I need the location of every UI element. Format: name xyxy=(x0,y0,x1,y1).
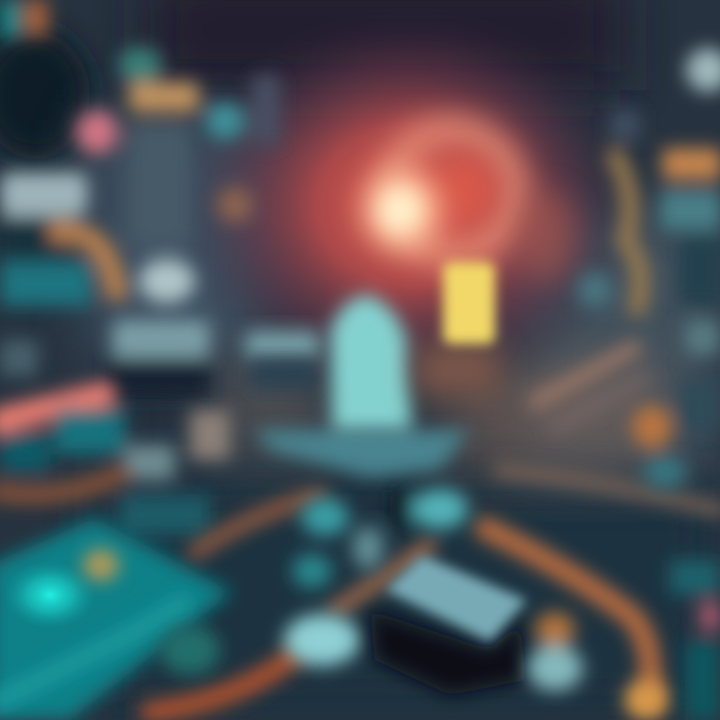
left lower blocks xyxy=(0,380,230,535)
left tower shapes xyxy=(0,0,280,400)
bottom right nodes xyxy=(160,612,668,720)
red glow xyxy=(175,5,645,405)
central tower and platform xyxy=(245,295,500,478)
yellow bulb base xyxy=(443,262,495,344)
right side shapes xyxy=(530,48,720,720)
small teal nodes xyxy=(284,489,468,666)
orange dot xyxy=(83,549,119,581)
light bulb glow xyxy=(366,130,575,344)
teal platform xyxy=(0,518,232,720)
bright cyan glow xyxy=(4,561,96,629)
dark box with light top xyxy=(370,555,527,695)
orange pipes xyxy=(150,470,720,712)
